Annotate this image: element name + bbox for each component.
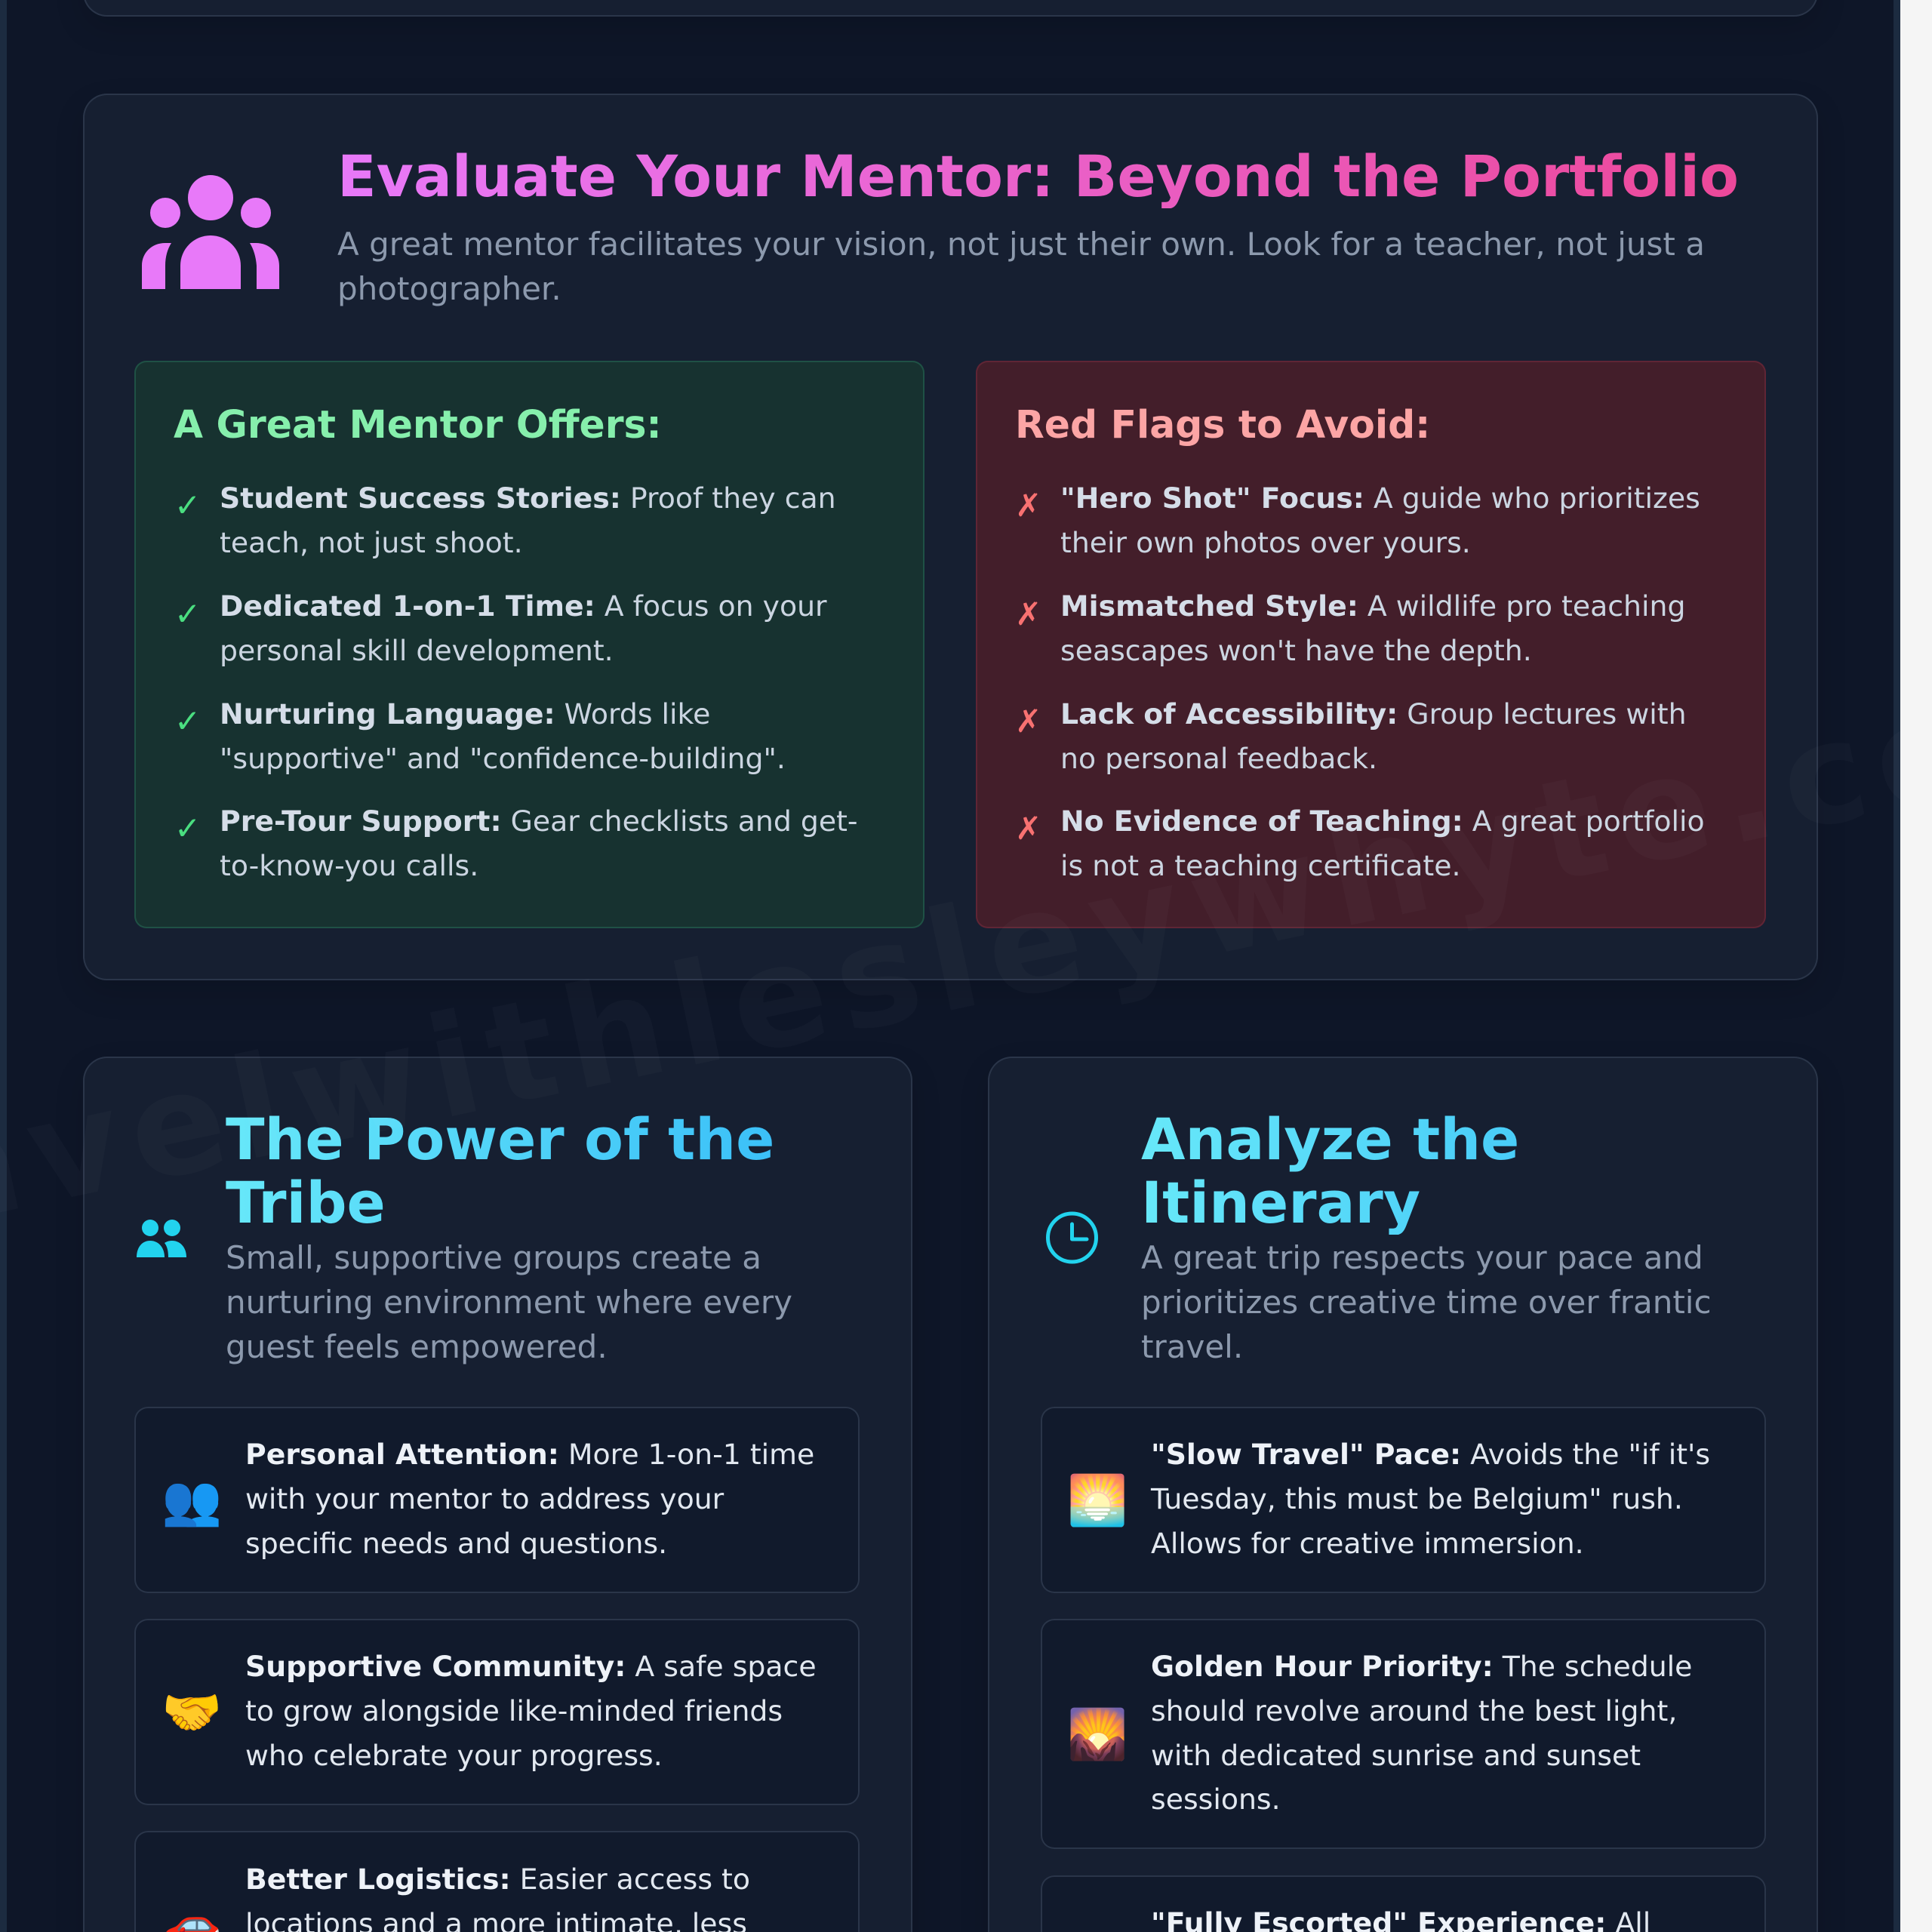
list item 1: Student Success Stories: Proof they can [220, 481, 836, 515]
subtitle [1141, 1239, 1712, 1365]
panel: red flags [976, 361, 1766, 928]
text [1151, 1650, 1692, 1816]
icon: sunrise over mountains emoji: 🌄 [1067, 1706, 1128, 1763]
subtitle: A great trip respects your pace and [1141, 1239, 1703, 1276]
title [226, 1108, 814, 1235]
list item 3: Nurturing Language: Words like [220, 697, 710, 731]
text [245, 1863, 750, 1932]
cross mark 1: ✗ [1015, 487, 1041, 524]
text [245, 1438, 814, 1560]
panel: great mentor offers [134, 361, 924, 928]
text: to grow alongside like-minded friends [245, 1694, 783, 1727]
subtitle [226, 1239, 792, 1365]
subtitle: Small, supportive groups create a [226, 1239, 761, 1276]
list item 4 [1060, 804, 1705, 882]
cross mark 3: ✗ [1015, 703, 1041, 740]
panel: previous section (cut off at top) [83, 0, 1818, 17]
list item 1: "Hero Shot" Focus: A guide who prioritizes [1060, 481, 1700, 515]
list item 2 [1060, 589, 1685, 667]
list item 3: Lack of Accessibility: Group lectures with [1060, 697, 1687, 731]
card: better logistics [134, 1831, 860, 1932]
list item 2: Mismatched Style: A wildlife pro teaching [1060, 589, 1685, 623]
list item 4: No Evidence of Teaching: A great portfolio [1060, 804, 1705, 838]
icon: sunrise emoji: 🌅 [1067, 1472, 1128, 1529]
check mark 4: ✓ [174, 810, 201, 847]
text: Tuesday, this must be Belgium" rush. [1151, 1482, 1683, 1515]
list item 1 [1060, 481, 1700, 559]
text: Personal Attention: More 1-on-1 time [245, 1438, 814, 1471]
list item 4: Pre-Tour Support: Gear checklists and get- [220, 804, 858, 838]
text: Supportive Community: A safe space [245, 1650, 817, 1683]
list item 2 [220, 589, 827, 667]
list item 1 [220, 481, 836, 559]
text: sessions. [1151, 1783, 1281, 1816]
title [1141, 1108, 1730, 1235]
text: Golden Hour Priority: The schedule [1151, 1650, 1692, 1683]
list item 3 [1060, 697, 1687, 775]
list item 3: no personal feedback. [1060, 742, 1377, 775]
list item 1: their own photos over yours. [1060, 526, 1471, 559]
subtitle: prioritizes creative time over frantic [1141, 1284, 1712, 1321]
check mark 1: ✓ [174, 487, 201, 524]
icon: handshake emoji: 🤝 [162, 1683, 222, 1740]
check mark 3: ✓ [174, 703, 201, 740]
icon: people emoji: 👥 [162, 1472, 222, 1529]
icon: group of people [142, 175, 279, 289]
list item 3 [220, 697, 786, 775]
text: specific needs and questions. [245, 1527, 667, 1560]
icon: two people [137, 1220, 186, 1257]
text: Better Logistics: Easier access to [245, 1863, 750, 1896]
check mark 2: ✓ [174, 595, 201, 632]
list item 2: personal skill development. [220, 634, 614, 667]
title: The Power of the [226, 1106, 774, 1173]
card: golden hour [1041, 1619, 1766, 1849]
list item 4 [220, 804, 858, 882]
list item 2: seascapes won't have the depth. [1060, 634, 1532, 667]
list item 2: Dedicated 1-on-1 Time: A focus on your [220, 589, 827, 623]
list item 4: is not a teaching certificate. [1060, 849, 1460, 882]
text: "Slow Travel" Pace: Avoids the "if it's [1151, 1438, 1710, 1471]
card: personal attention [134, 1407, 860, 1593]
icon: clock [1046, 1212, 1098, 1263]
panel: power of the tribe [83, 1057, 912, 1932]
title: Itinerary [1141, 1170, 1420, 1236]
text: with your mentor to address your [245, 1482, 724, 1515]
subtitle: photographer. [337, 270, 561, 307]
cross mark 4: ✗ [1015, 810, 1041, 847]
heading: A Great Mentor Offers: [174, 402, 662, 447]
card: supportive community [134, 1619, 860, 1805]
heading: Red Flags to Avoid: [1015, 402, 1430, 447]
cross mark 2: ✗ [1015, 595, 1041, 632]
subtitle: nurturing environment where every [226, 1284, 792, 1321]
card: fully escorted [1041, 1875, 1766, 1932]
text [1150, 1438, 1710, 1560]
panel: evaluate your mentor [83, 94, 1818, 980]
subtitle: travel. [1141, 1328, 1243, 1365]
title: Tribe [226, 1170, 386, 1236]
text: with dedicated sunrise and sunset [1151, 1739, 1641, 1772]
panel: analyze the itinerary [988, 1057, 1818, 1932]
text: Allows for creative immersion. [1151, 1527, 1584, 1560]
subtitle [337, 226, 1705, 307]
title: Evaluate Your Mentor: Beyond the Portfolio [337, 143, 1739, 210]
list item 1: teach, not just shoot. [220, 526, 523, 559]
list item 4: to-know-you calls. [220, 849, 478, 882]
title: Analyze the [1141, 1106, 1519, 1173]
list item 3: "supportive" and "confidence-building". [220, 742, 786, 775]
card: slow travel [1041, 1407, 1766, 1593]
text: who celebrate your progress. [245, 1739, 663, 1772]
subtitle: A great mentor facilitates your vision, not just their own. Look for a teacher, not just a [337, 226, 1705, 263]
text: should revolve around the best light, [1151, 1694, 1677, 1727]
subtitle: guest feels empowered. [226, 1328, 608, 1365]
text [245, 1650, 817, 1772]
